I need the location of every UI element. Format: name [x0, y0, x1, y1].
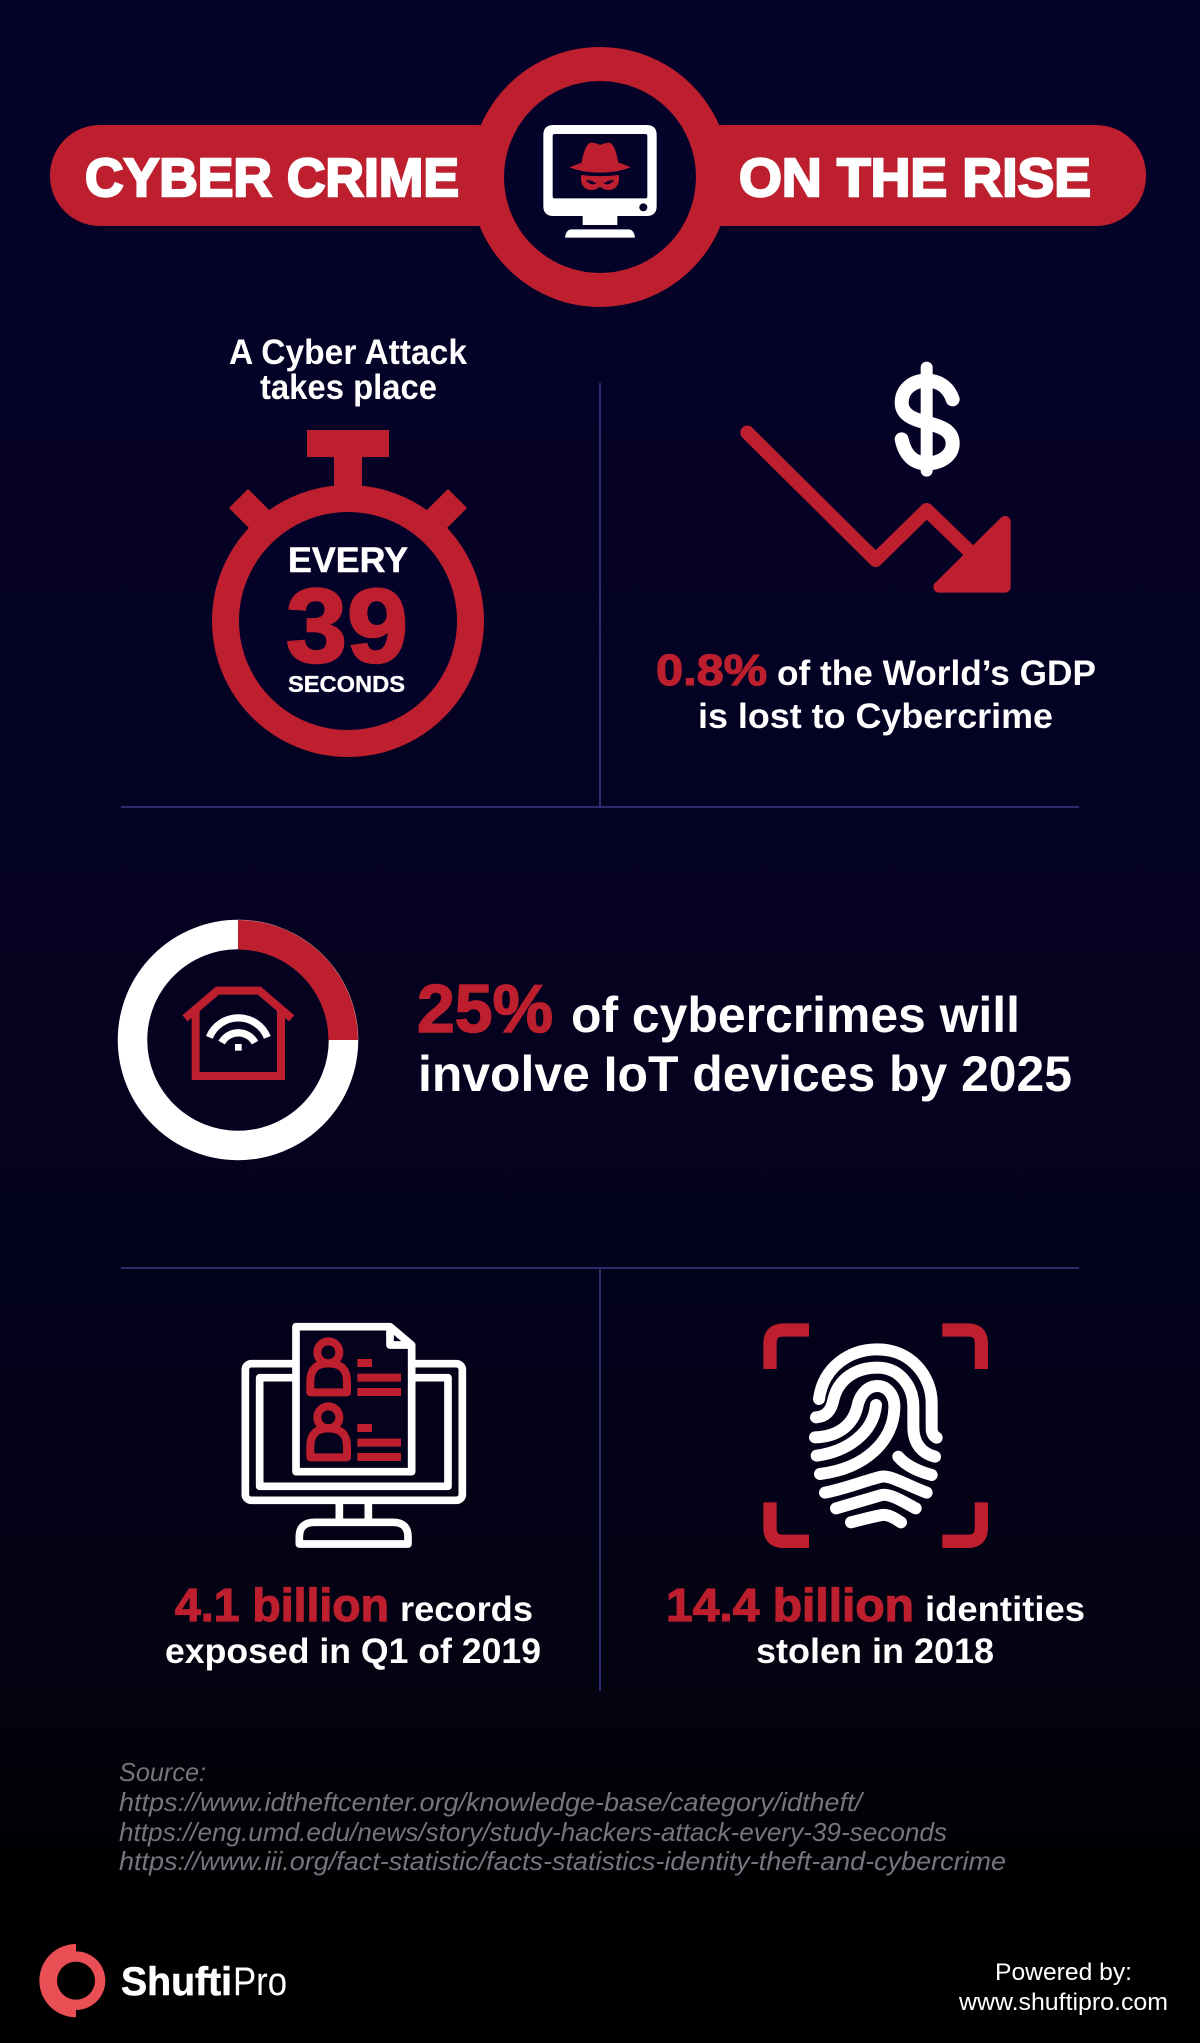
panel: attack every 39 seconds [226, 333, 470, 744]
logo: shuftipro [39, 1944, 287, 2017]
panel: GDP loss [656, 368, 1096, 736]
source list: https://eng.umd.edu/news/story/study-hackers-attack-every-39-seconds [119, 1817, 947, 1847]
heading: a cyber attack: A Cyber Attack [229, 333, 468, 372]
heading: takes place: takes place [260, 368, 437, 407]
icon: falling arrow [747, 433, 1005, 587]
title right: ON THE RISE [739, 148, 1091, 208]
text: of cybercrimes will: of cybercrimes will [571, 987, 1020, 1043]
donut chart [132, 920, 358, 1146]
wordmark shufti: Shufti [121, 1960, 232, 2004]
wordmark pro: Pro [233, 1960, 287, 2004]
icon: logo ring [39, 1944, 105, 2017]
text: involve iot devices: involve IoT devices by 2025 [418, 1046, 1072, 1102]
icon: stopwatch [226, 430, 470, 744]
icon: monitor with records [245, 1327, 462, 1544]
powered by: Powered by: [995, 1959, 1132, 1986]
title left: CYBER CRIME [85, 148, 459, 208]
icon: smart home [185, 991, 292, 1076]
text: identities: identities [925, 1590, 1085, 1629]
dividers [121, 383, 1079, 1691]
seconds: SECONDS [288, 671, 405, 697]
text: stolen in 2018: stolen in 2018 [756, 1632, 994, 1671]
powered by [958, 1959, 1168, 2016]
powered by: www.shuftipro.com [958, 1989, 1168, 2016]
text: exposed in q1: exposed in Q1 of 2019 [165, 1632, 541, 1671]
source list: Source: [119, 1757, 206, 1787]
stat 14.4 billion: 14.4 billion [666, 1579, 914, 1631]
text: records: records [400, 1590, 533, 1629]
source list [119, 1757, 1006, 1876]
stat 4.1 billion: 4.1 billion [175, 1579, 389, 1631]
title banner [50, 64, 1146, 290]
number 39: 39 [286, 568, 408, 685]
source list: https://www.idtheftcenter.org/knowledge-base/category/idtheft/ [119, 1787, 865, 1817]
text: of the world's gdp: of the World’s GDP [777, 654, 1096, 693]
icon: dollar sign [902, 368, 953, 471]
banner pill [50, 125, 1146, 226]
stat 0.8%: 0.8% [656, 646, 767, 695]
source list: https://www.iii.org/fact-statistic/facts-statistics-identity-theft-and-cybercrime [119, 1846, 1006, 1876]
text: is lost to cybercrime: is lost to Cybercrime [698, 697, 1053, 736]
icon: scan corners [770, 1330, 981, 1541]
icon: fingerprint [815, 1349, 937, 1522]
panel: identities stolen [666, 1330, 1085, 1671]
every: EVERY [288, 541, 408, 580]
banner ring [487, 64, 713, 290]
panel: records exposed [165, 1327, 541, 1671]
panel: IoT stat [132, 920, 1072, 1146]
stat 25%: 25% [417, 971, 553, 1047]
icon: hacker monitor [543, 125, 657, 238]
